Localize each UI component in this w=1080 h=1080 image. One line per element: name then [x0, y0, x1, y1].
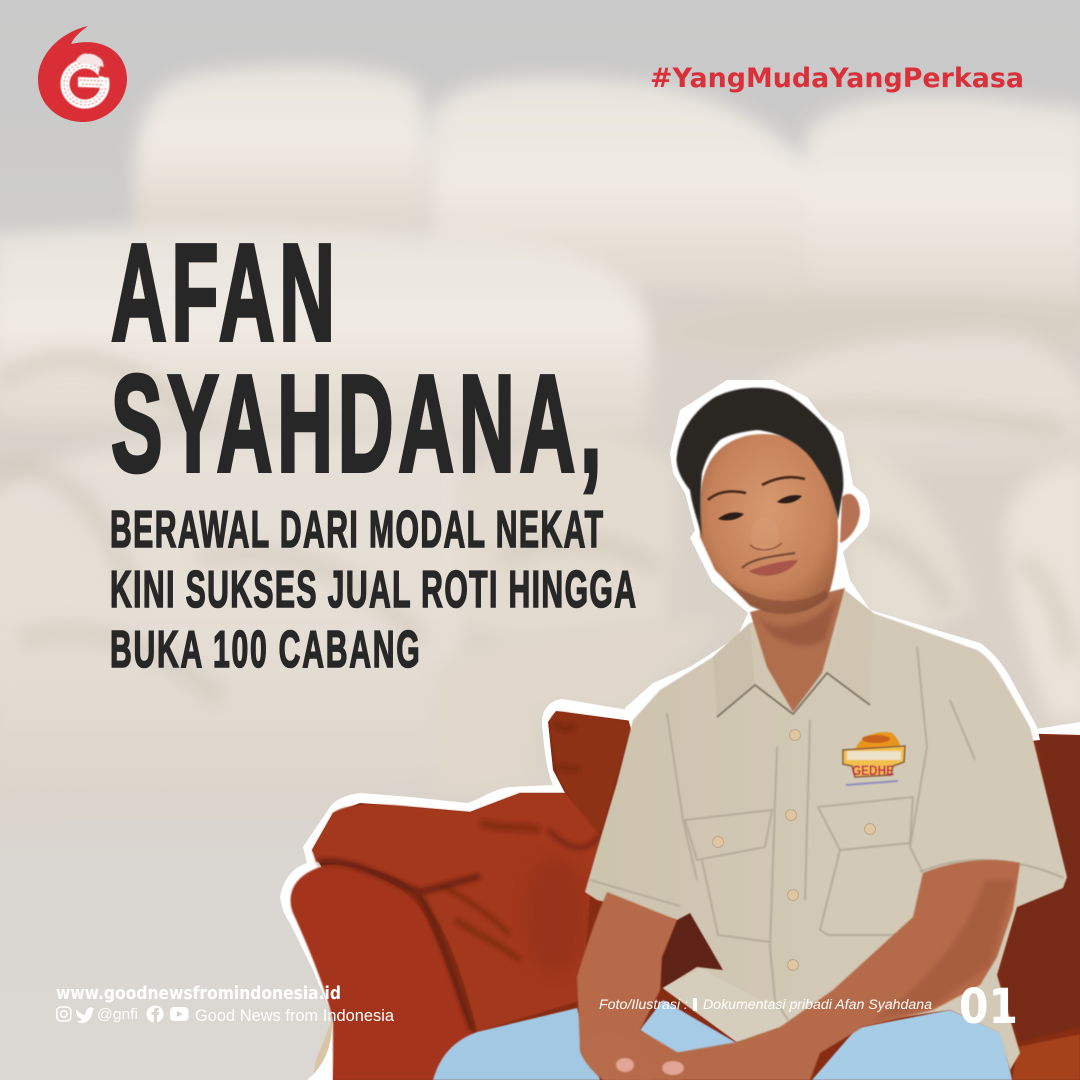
left arm — [577, 892, 690, 1080]
hair — [677, 388, 843, 537]
hashtag: #YangMudaYangPerkasa — [650, 63, 1024, 94]
fingertips — [616, 1058, 684, 1075]
shirt logo: GEDHE — [852, 762, 894, 778]
photo credit: Foto/Ilustrasi : — [599, 997, 688, 1012]
neck — [750, 588, 845, 712]
channel name: Good News from Indonesia — [195, 1007, 395, 1025]
icon: twitter — [76, 1007, 94, 1023]
footer: website: www.goodnewsfromindonesia.id — [56, 984, 341, 1004]
sofa gap behind arm — [660, 912, 724, 990]
sofa dark patch — [525, 855, 585, 975]
icon: facebook — [146, 1006, 164, 1023]
sofa right cushion — [998, 736, 1080, 1042]
jeans — [433, 995, 1012, 1080]
subtitle: KINI SUKSES JUAL ROTI HINGGA — [110, 562, 636, 619]
title: Afan Syahdana — [111, 215, 602, 501]
shirt torso — [585, 590, 1067, 1070]
photo credit — [599, 997, 933, 1012]
subtitle: BUKA 100 CABANG — [110, 622, 420, 679]
handle: @gnfi — [97, 1007, 138, 1023]
sofa white cut-out outline — [280, 699, 1080, 1080]
photo: sofa — [280, 699, 1080, 1080]
face — [700, 434, 838, 615]
right forearm — [630, 860, 1020, 1080]
sofa base — [312, 711, 1080, 1080]
eyes, nose and mouth — [708, 477, 805, 576]
logo: GNFI — [38, 26, 127, 122]
sofa wooden leg — [312, 1010, 340, 1080]
sofa front roll — [291, 863, 476, 1080]
shirt collars — [713, 590, 873, 717]
person white outline — [625, 380, 1040, 760]
sofa folds — [318, 722, 600, 1030]
ear — [840, 494, 860, 543]
sofa back cushion — [550, 712, 632, 835]
shirt buttons — [712, 730, 876, 970]
icon: youtube — [170, 1007, 188, 1021]
subtitle: BERAWAL DARI MODAL NEKAT — [110, 502, 603, 559]
subtitle — [110, 502, 636, 679]
title: Afan Syahdana: SYAHDANA, — [111, 346, 602, 501]
neck shadow — [752, 596, 838, 645]
arm shading — [870, 880, 1015, 1022]
logo medallion — [64, 53, 109, 105]
shirt seams and pockets — [590, 647, 1064, 1020]
chin shadow — [722, 576, 828, 614]
shirt tail — [663, 968, 800, 1042]
footer: social icons and handles — [57, 1006, 395, 1025]
left hand — [580, 1033, 660, 1080]
photo: person — [433, 380, 1067, 1080]
shirt logo — [843, 732, 905, 785]
icon: instagram — [57, 1007, 71, 1021]
photo credit: Dokumentasi pribadi Afan Syahdana — [703, 997, 933, 1012]
page number: 01 — [959, 979, 1018, 1035]
sofa right seat — [1012, 1034, 1080, 1080]
sofa arm top — [312, 793, 600, 1032]
title: Afan Syahdana: AFAN — [111, 215, 335, 370]
